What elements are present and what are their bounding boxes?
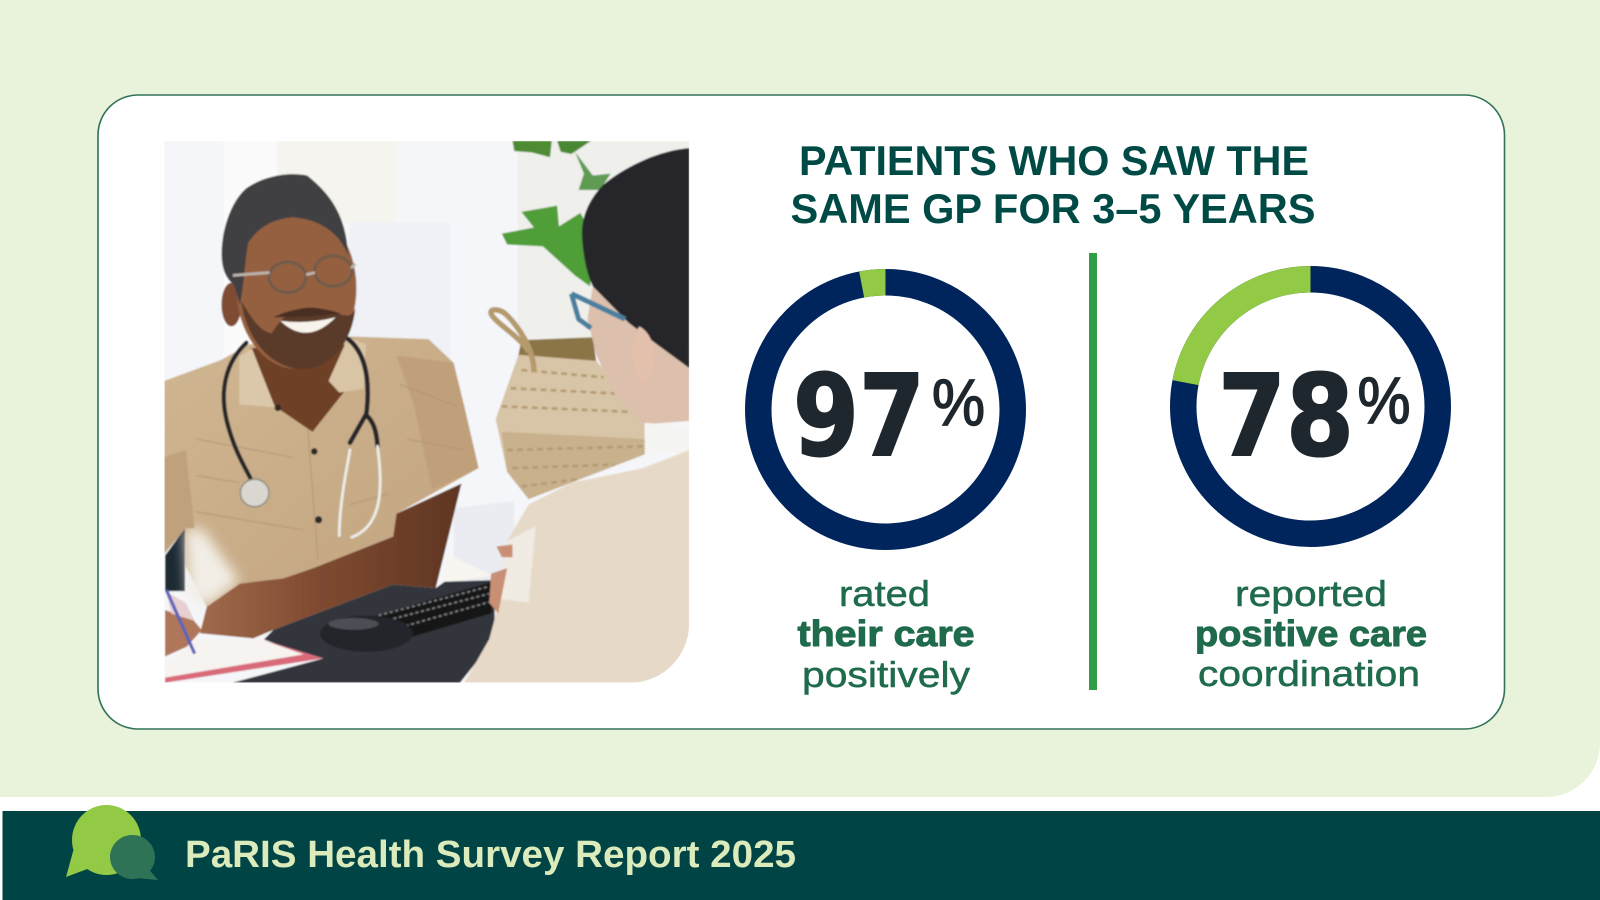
- stethoscope: [224, 339, 380, 537]
- donut chart: 97%: 97: [793, 352, 925, 482]
- donut chart: 78%: [1183, 279, 1438, 534]
- shirt: [164, 337, 479, 607]
- donut chart: 78%: 78: [1218, 352, 1354, 482]
- donut chart: 97%: [758, 282, 1013, 537]
- donut chart: 78%: %: [1358, 363, 1410, 437]
- label: reported positive care coordination: [1195, 573, 1427, 694]
- label: reported positive care coordination: coordination: [1198, 653, 1420, 694]
- footer band: [2, 811, 1600, 900]
- icon: speech bubbles logo: [66, 805, 158, 880]
- head: [221, 283, 241, 326]
- main card: [98, 95, 1504, 729]
- title: PATIENTS WHO SAW THE: [799, 137, 1309, 184]
- donut chart: 97%: %: [932, 365, 985, 439]
- desk: [232, 580, 495, 683]
- arm and hand: [200, 483, 461, 638]
- label: rated their care positively: [798, 573, 974, 695]
- label: rated their care positively: rated: [839, 573, 930, 614]
- paper and folder: [165, 639, 304, 677]
- label: rated their care positively: positively: [802, 654, 970, 695]
- divider: [1089, 253, 1097, 690]
- footer text: PaRIS Health Survey Report 2025: [185, 834, 796, 876]
- photo: doctor smiling at patient across desk: [164, 141, 689, 683]
- label: reported positive care coordination: positive care: [1195, 613, 1427, 654]
- title: [790, 137, 1316, 232]
- label: rated their care positively: their care: [798, 613, 974, 654]
- label: reported positive care coordination: reported: [1235, 573, 1387, 614]
- title: SAME GP FOR 3–5 YEARS: [790, 185, 1316, 232]
